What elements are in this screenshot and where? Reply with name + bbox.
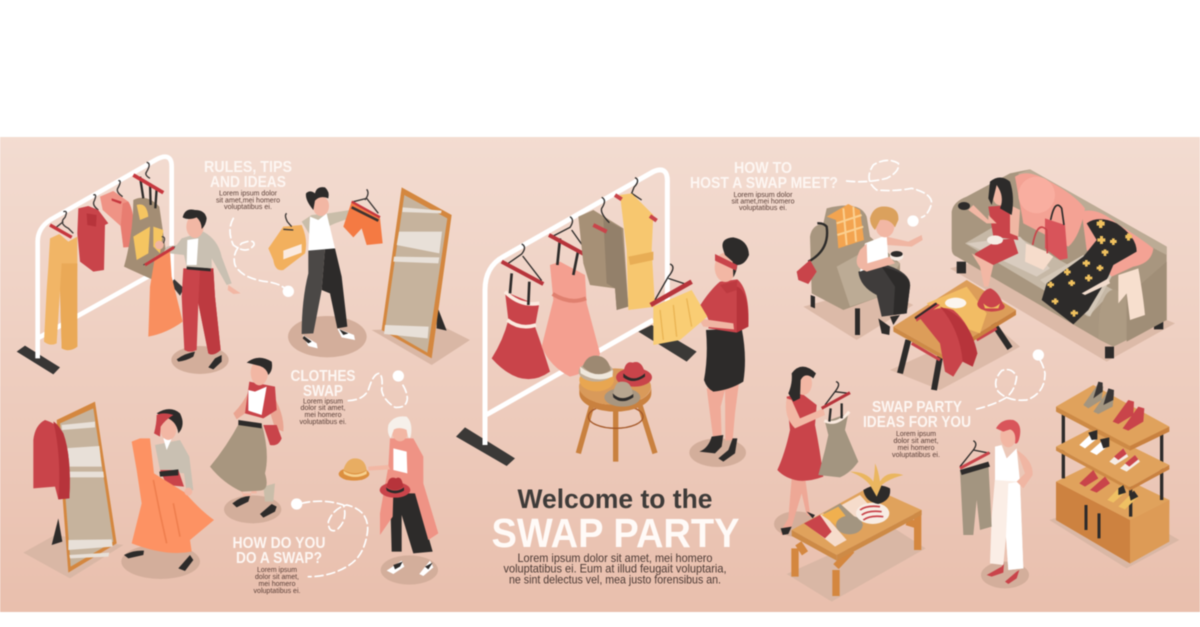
connector: clothes swap — [348, 370, 407, 407]
heading: how to host a swap meet: sit amet,mei homero — [732, 196, 794, 206]
woman holding orange dress — [121, 409, 214, 579]
woman in white with trousers on hanger — [960, 420, 1033, 588]
scene: host a swap meet — [797, 169, 1175, 390]
heading: how to host a swap meet — [690, 160, 838, 212]
woman with white hair and hats — [339, 416, 438, 585]
connector: swap party ideas — [977, 349, 1045, 409]
heading: swap party ideas for you — [863, 399, 971, 459]
title block: voluptatibus ei. Eum at illud feugait voluptaria, — [504, 562, 726, 576]
heading: rules, tips and ideas: RULES, TIPS — [204, 159, 292, 176]
shoes: red pair — [1113, 400, 1144, 431]
grey hat with bow — [579, 356, 613, 382]
heading: rules, tips and ideas — [204, 159, 292, 211]
heading: rules, tips and ideas: Lorem ipsum dolor — [219, 189, 277, 198]
scene: swap party ideas — [774, 367, 1179, 602]
rack bases — [456, 325, 697, 466]
second rack base — [173, 278, 184, 296]
background panel — [0, 137, 1200, 612]
scene: rules, tips and ideas — [17, 157, 470, 374]
heading: how to host a swap meet: voluptatibus ei. — [739, 203, 787, 212]
title block: Lorem ipsum dolor sit amet, mei homero — [518, 551, 713, 565]
scene: main rack and host — [456, 170, 749, 467]
red brimmed hat — [616, 362, 652, 387]
heading: how to host a swap meet: Lorem ipsum dolor — [734, 190, 793, 199]
connector: how do you swap — [291, 498, 368, 577]
heading: clothes swap — [290, 368, 356, 426]
wooden display table — [787, 463, 926, 602]
heading: how do you do a swap: HOW DO YOU — [232, 535, 326, 552]
jumpsuit on hanger — [44, 211, 77, 350]
heading: swap party ideas for you: dolor sit amet, — [894, 436, 938, 445]
tan brimmed hat — [604, 382, 640, 407]
heading: clothes swap: voluptatibus ei. — [300, 417, 346, 426]
title block: Welcome to the — [518, 484, 712, 514]
shoes: white pair — [1079, 432, 1109, 455]
heading: how do you do a swap: mei homero — [258, 579, 296, 588]
clothes rack — [38, 157, 172, 358]
floor mirror — [372, 187, 470, 365]
red dress on hanger — [492, 244, 550, 379]
connector: how to host — [847, 160, 932, 227]
heading: clothes swap: SWAP — [303, 383, 343, 400]
person holding two garments — [268, 187, 383, 357]
heading: clothes swap: CLOTHES — [290, 368, 356, 385]
shoes: red and white pair — [1109, 448, 1140, 472]
heading: rules, tips and ideas: sit amet,mei homero — [216, 195, 280, 204]
connector: rules, tips — [230, 218, 294, 297]
heading: clothes swap: dolor sit amet, — [300, 403, 346, 412]
heading: swap party ideas for you: voluptatibus ei. — [892, 450, 940, 459]
heading: how to host a swap meet: HOW TO — [734, 160, 792, 177]
heading: how do you do a swap: voluptatibus ei. — [254, 586, 300, 595]
title block: SWAP PARTY — [492, 510, 740, 556]
red hat — [380, 478, 410, 498]
heading: how to host a swap meet: HOST A SWAP MEET? — [690, 175, 838, 192]
pink dress on hanger — [542, 217, 600, 377]
heading: swap party ideas for you: Lorem ipsum — [896, 429, 936, 438]
heading: swap party ideas for you: mei homero — [898, 443, 934, 452]
connector dot — [393, 370, 404, 382]
shoe shelf — [1049, 382, 1179, 568]
heading: how do you do a swap — [232, 535, 326, 595]
woman in black skirt — [689, 237, 749, 467]
grey dress on hanger — [818, 382, 858, 477]
heading: how do you do a swap: dolor sit amet, — [255, 572, 299, 581]
heading: clothes swap: mei homero — [304, 410, 342, 419]
person with orange dress — [143, 209, 241, 374]
stool with hats — [578, 356, 655, 462]
yellow dress on hanger — [615, 178, 657, 310]
connector dot — [1033, 349, 1044, 361]
mirror with red jacket — [23, 402, 123, 578]
title block — [492, 484, 740, 586]
yellow skirt on hanger — [651, 264, 707, 345]
red top on hanger — [77, 195, 108, 272]
rack base — [17, 346, 60, 374]
straw hat — [339, 458, 369, 481]
woman in red dress with hanger — [774, 367, 825, 537]
shoes: black and tan pair — [1083, 383, 1114, 414]
floral dress on hanger — [124, 162, 167, 280]
woman with tan skirt — [210, 358, 283, 523]
heading: rules, tips and ideas: AND IDEAS — [210, 174, 286, 191]
coffee table — [890, 280, 1020, 390]
woman in white top with cup — [857, 206, 923, 335]
connector dot — [283, 286, 294, 297]
sofa with woman, bags and dress — [950, 169, 1175, 362]
heading: swap party ideas for you: SWAP PARTY — [872, 399, 963, 416]
pink cardigan on hanger — [100, 181, 135, 247]
tan jacket on hanger — [578, 197, 628, 310]
title block: ne sint delectus vel, mea justo forensibus an. — [509, 572, 721, 586]
heading: clothes swap: Lorem ipsum — [303, 396, 343, 406]
connector dot — [291, 498, 302, 510]
heading: how do you do a swap: Lorem ipsum — [257, 565, 297, 574]
heading: how do you do a swap: DO A SWAP? — [236, 550, 322, 567]
large clothes rack — [485, 170, 667, 445]
shoes: yellow pair — [1107, 485, 1138, 509]
heading: rules, tips and ideas: voluptatibus ei. — [224, 202, 272, 211]
connector dot — [907, 215, 919, 227]
heading: swap party ideas for you: IDEAS FOR YOU — [863, 414, 971, 431]
shoes: dark red pair — [1079, 470, 1110, 493]
armchair with blanket and bag — [797, 204, 913, 340]
scene: clothes swap — [23, 358, 438, 585]
orange hat — [579, 369, 614, 391]
